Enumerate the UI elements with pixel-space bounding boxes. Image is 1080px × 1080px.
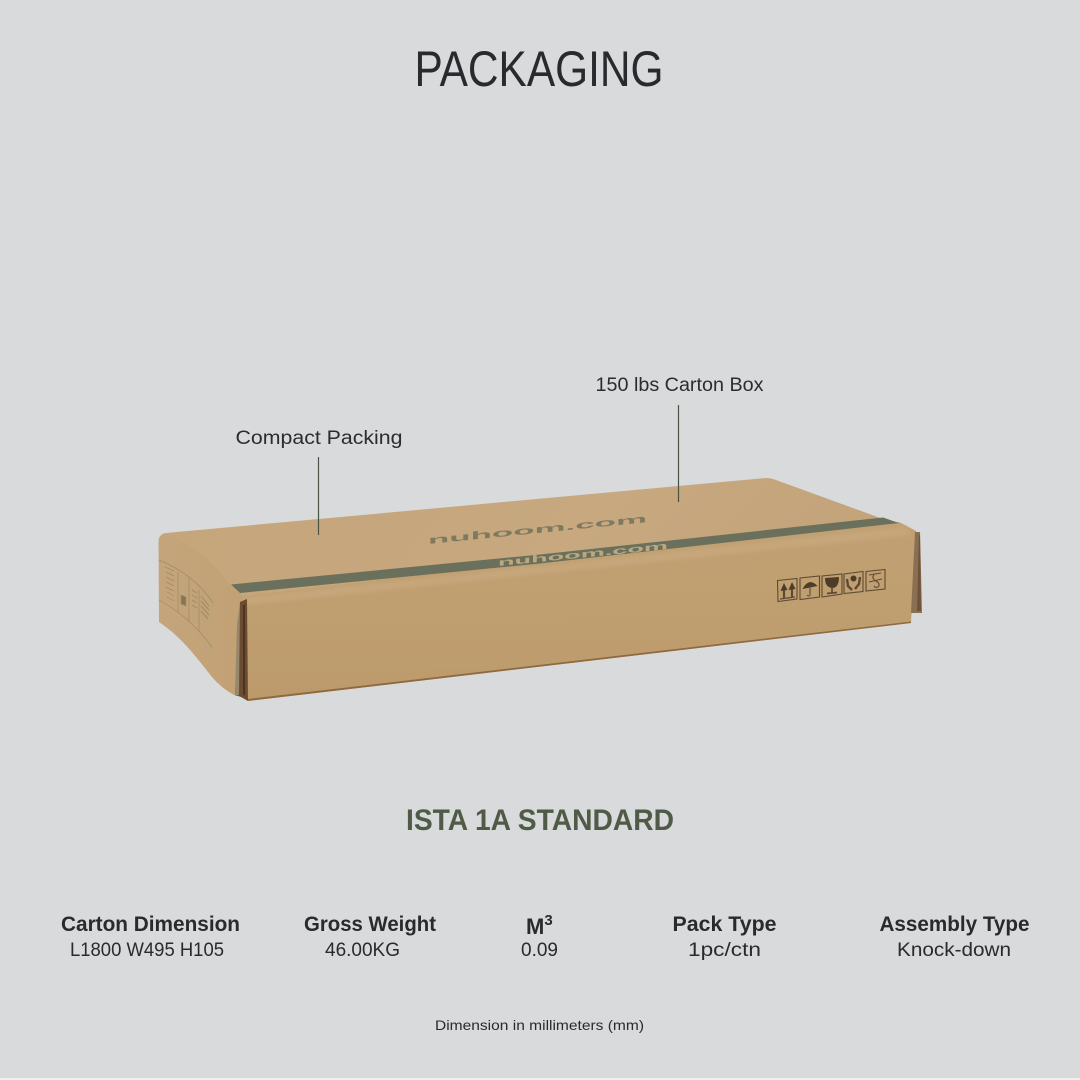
spec: pack type: Pack Type xyxy=(672,913,776,936)
spec: gross weight: Gross Weight xyxy=(304,913,436,936)
spec: carton dimension: Carton Dimension xyxy=(61,913,240,936)
icon: fragile xyxy=(822,574,842,597)
right corrugated flap xyxy=(911,532,922,613)
spec: assembly type xyxy=(880,913,1030,961)
spec: assembly type: Assembly Type xyxy=(880,913,1030,936)
tape print: nuhoom.com xyxy=(498,540,668,568)
icon: keep dry xyxy=(800,576,820,600)
spec: cubic metres: 3 xyxy=(544,912,553,929)
box side face xyxy=(158,533,250,696)
title: PACKAGING xyxy=(414,41,664,97)
footnote: Dimension in millimeters (mm) xyxy=(435,1017,644,1033)
spec: pack type: 1pc/ctn xyxy=(688,940,761,961)
top print: nuhoom.com xyxy=(428,513,647,547)
spec: gross weight xyxy=(304,913,436,961)
spec: pack type xyxy=(672,913,776,961)
icon: this way up xyxy=(778,578,797,602)
spec: cubic metres xyxy=(521,912,558,961)
callout: 150 lbs carton box: 150 lbs Carton Box xyxy=(596,375,764,396)
side panel print xyxy=(159,560,213,647)
left corrugated flap xyxy=(235,599,248,701)
box front face xyxy=(244,522,916,701)
green tape xyxy=(231,518,899,593)
spec: cubic metres: 0.09 xyxy=(521,940,558,961)
spec: carton dimension: L1800 W495 H105 xyxy=(70,940,224,961)
box top face xyxy=(166,478,916,600)
callout: compact packing: Compact Packing xyxy=(236,428,402,449)
spec: gross weight: 46.00KG xyxy=(325,940,400,961)
icon: handle with care xyxy=(844,572,863,594)
handling icons xyxy=(778,570,885,602)
spec: assembly type: Knock-down xyxy=(897,940,1011,961)
spec: carton dimension xyxy=(61,913,240,961)
icon: do not stack xyxy=(866,570,885,591)
spec: cubic metres: M xyxy=(526,914,544,939)
standard heading: ISTA 1A STANDARD xyxy=(406,804,674,837)
carton box xyxy=(158,478,922,701)
